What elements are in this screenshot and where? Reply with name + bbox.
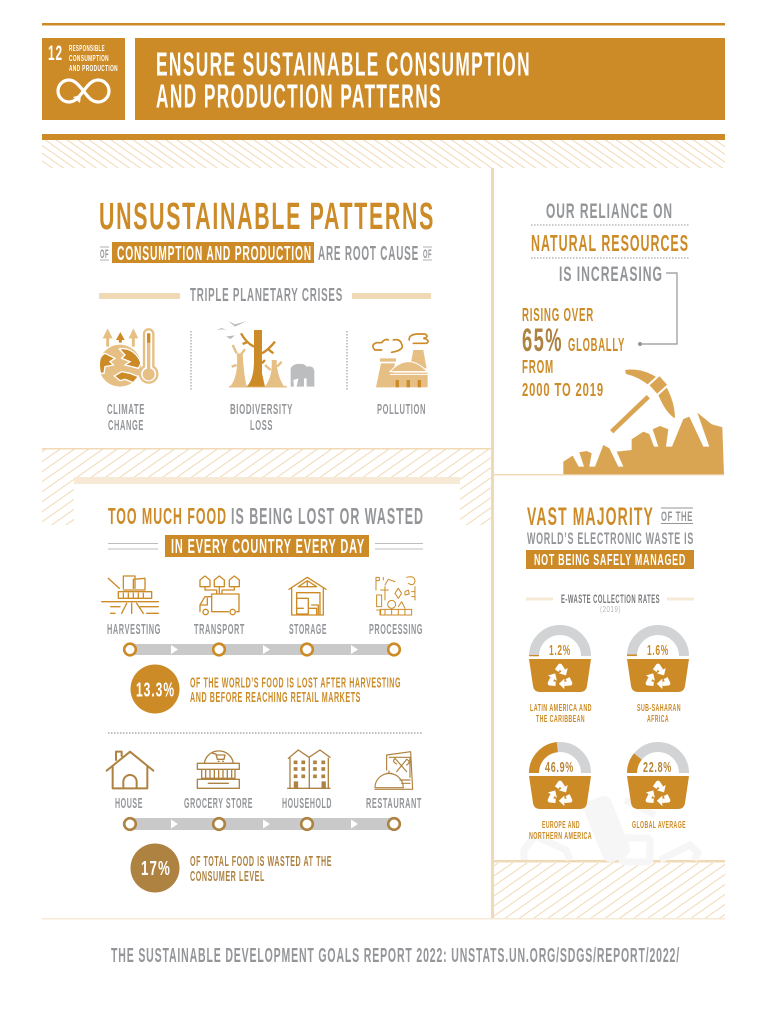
text: food loss description <box>190 676 401 706</box>
stat: 65% rising <box>522 305 625 400</box>
icon: household <box>288 750 330 788</box>
SDG 12 badge: 12 <box>48 41 63 65</box>
labels: consumer stages: HOUSE <box>115 796 143 812</box>
label: climate change: CHANGE <box>108 418 144 434</box>
label: biodiversity loss: LOSS <box>250 418 273 434</box>
labels: food chain stages: HARVESTING <box>107 622 161 638</box>
SDG 12 badge <box>42 38 125 120</box>
panel: electronic waste <box>524 503 698 862</box>
chart: latin america basket: 1.2% <box>549 642 571 659</box>
chart: europe and northern america basket: 46.9% <box>545 759 574 776</box>
labels: food chain stages: TRANSPORT <box>194 622 245 638</box>
labels: food chain stages <box>107 622 423 638</box>
heading: too much food: IS BEING LOST OR WASTED <box>231 503 424 529</box>
label: climate change: CLIMATE <box>107 402 145 418</box>
subheading: in every country <box>108 535 423 558</box>
background icon: e-waste silhouettes <box>524 798 698 862</box>
icon: pollution <box>373 334 428 387</box>
panel: food loss and waste: PROCESSING <box>369 622 423 638</box>
subheading: root cause: OF <box>100 249 109 261</box>
heading: vast majority: VAST MAJORITY <box>527 503 654 531</box>
timeline: waste stages <box>124 818 400 830</box>
chart: global average basket: GLOBAL AVERAGE <box>632 820 686 831</box>
stat: 17% <box>130 844 180 892</box>
label: climate change <box>107 402 145 434</box>
chart: latin america basket: THE CARIBBEAN <box>536 714 585 725</box>
chart: europe and northern america basket <box>529 747 592 842</box>
stat: 13.3%: 13.3% <box>136 678 175 702</box>
SDG 12 badge: CONSUMPTION <box>69 53 109 63</box>
subheading: root cause: ARE ROOT CAUSE <box>318 242 419 265</box>
subheading: triple planetary crises: TRIPLE PLANETARY CRISES <box>190 285 343 305</box>
icon: pickaxe and mountains <box>563 369 724 474</box>
icon: grocery store <box>197 751 239 788</box>
chart: sub-saharan africa basket: SUB-SAHARAN <box>637 703 681 714</box>
chart: sub-saharan africa basket: 1.6% <box>647 642 669 659</box>
chart: europe and northern america basket: EUROPE AND <box>542 820 580 831</box>
icon: house <box>107 752 153 788</box>
SDG 12 badge: RESPONSIBLE <box>69 43 105 53</box>
top rule <box>42 23 725 26</box>
text: food waste description <box>190 854 332 885</box>
heading: natural resources: IS INCREASING <box>559 262 663 286</box>
text: food waste description: CONSUMER LEVEL <box>190 869 265 885</box>
arrow: connector <box>638 273 677 346</box>
stat: 65% rising: RISING OVER <box>522 305 594 325</box>
chart: europe and northern america basket: NORTHERN AMERICA <box>529 831 592 842</box>
heading: natural resources <box>531 199 689 286</box>
label: biodiversity loss <box>230 402 293 434</box>
labels: food chain stages: STORAGE <box>289 622 327 638</box>
labels: consumer stages: RESTAURANT <box>366 796 422 812</box>
icon: restaurant <box>375 752 413 789</box>
stat: 13.3% <box>130 664 180 714</box>
label: pollution: POLLUTION <box>377 402 426 418</box>
chart: global average basket <box>627 747 689 831</box>
subheading: triple planetary crises <box>99 285 431 305</box>
labels: consumer stages <box>115 796 422 812</box>
icon: biodiversity loss <box>217 321 314 387</box>
stat: 65% rising: FROM <box>522 357 554 377</box>
text: food loss description: AND BEFORE REACHING RETAIL MARKETS <box>190 690 361 706</box>
subheading: e-waste collection rates <box>526 594 694 614</box>
label: biodiversity loss: BIODIVERSITY <box>230 402 293 418</box>
heading: unsustainable patterns: UNSUSTAINABLE PATTERNS <box>99 196 435 238</box>
subheading: e-waste collection rates: E-WASTE COLLECTION RATES <box>561 594 660 606</box>
stat: 65% rising: 2000 TO 2019 <box>522 380 604 400</box>
icon: climate change <box>99 328 157 387</box>
icon: harvesting <box>102 576 158 613</box>
chart: latin america basket: LATIN AMERICA AND <box>530 703 592 714</box>
labels: consumer stages: HOUSEHOLD <box>282 796 332 812</box>
heading: vast majority <box>526 503 694 569</box>
panel: natural resources <box>522 199 724 474</box>
timeline: loss stages <box>124 644 400 655</box>
SDG 12 badge: AND PRODUCTION <box>69 63 118 73</box>
title banner <box>135 38 725 120</box>
panel: food loss and waste: OF THE WORLD’S FOOD IS LOST AFTER HARVESTING <box>190 676 401 692</box>
icon: processing <box>376 577 415 615</box>
chart: sub-saharan africa basket: AFRICA <box>647 714 669 725</box>
title banner: AND PRODUCTION PATTERNS <box>156 78 442 114</box>
heading: natural resources: OUR RELIANCE ON <box>546 199 673 223</box>
subheading: e-waste collection rates: (2019) <box>600 604 621 614</box>
subheading: in every country: IN EVERY COUNTRY EVERY DAY <box>171 536 365 558</box>
heading: too much food: TOO MUCH FOOD <box>108 503 227 529</box>
chart: latin america basket <box>529 630 592 725</box>
heading: vast majority: OF THE <box>661 508 693 524</box>
subheading: root cause: CONSUMPTION AND PRODUCTION <box>117 242 312 265</box>
icon: storage <box>289 577 326 615</box>
labels: consumer stages: GROCERY STORE <box>184 796 253 812</box>
header bar <box>42 134 725 140</box>
panel: food loss and waste: OF TOTAL FOOD IS WASTED AT THE <box>190 854 332 870</box>
subheading: root cause: OF <box>423 249 432 261</box>
stat: 65% rising: GLOBALLY <box>568 335 625 355</box>
icon: transport <box>200 576 239 615</box>
panel: unsustainable patterns <box>99 196 435 434</box>
stat: 65% rising: 65% <box>522 322 563 358</box>
stat: 17%: 17% <box>141 857 171 880</box>
chart: global average basket: 22.8% <box>643 759 672 776</box>
panel: food loss and waste <box>102 503 424 892</box>
chart: sub-saharan africa basket <box>627 630 689 725</box>
